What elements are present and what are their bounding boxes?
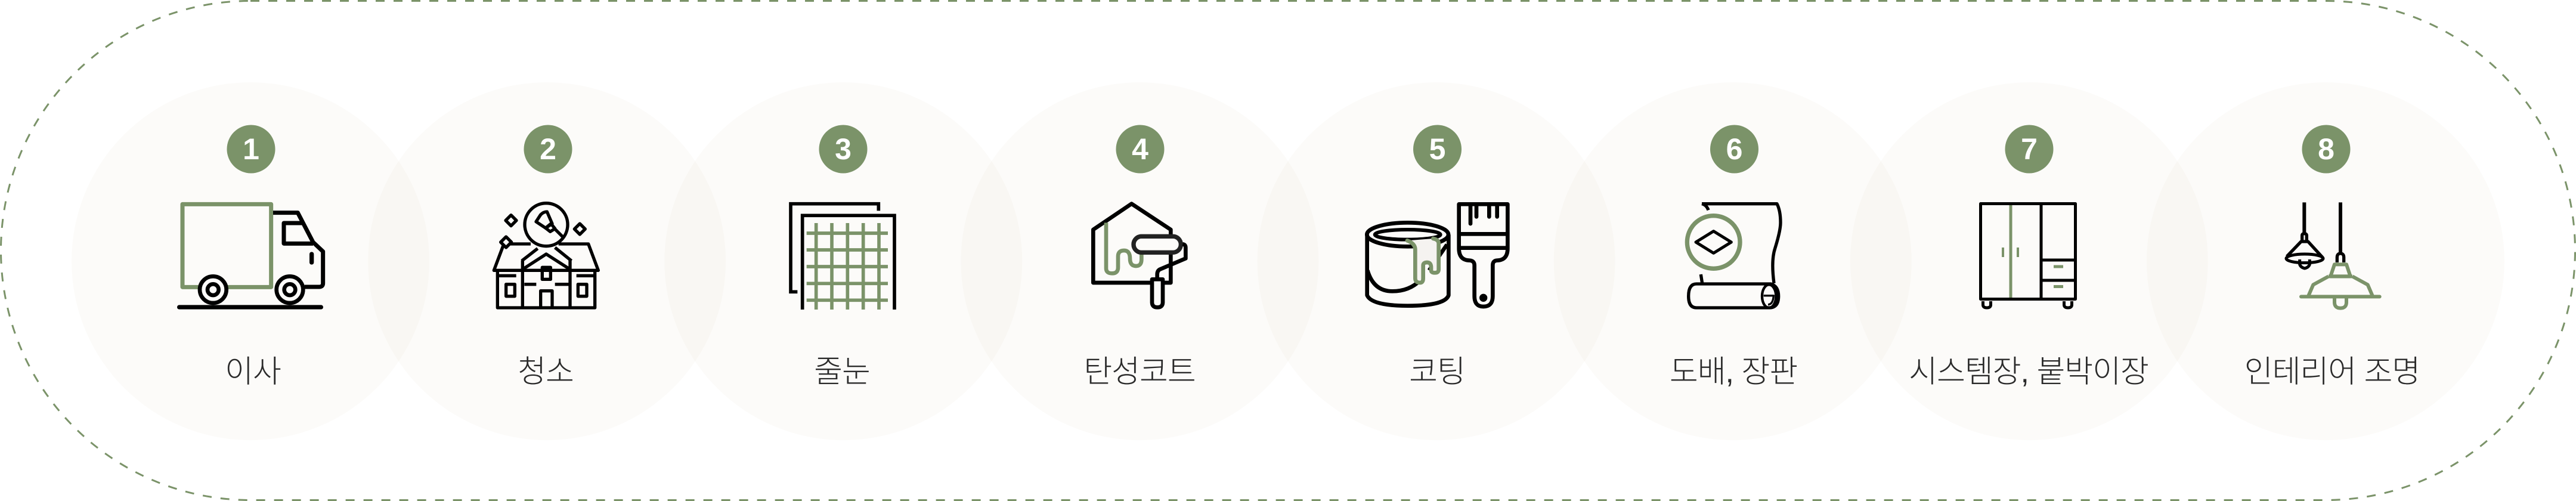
badge 1: 1	[243, 132, 259, 166]
badge 6: 6	[1726, 132, 1742, 166]
badge 3	[819, 125, 867, 173]
badge 3: 3	[835, 132, 852, 166]
label 줄눈: 줄눈	[814, 355, 870, 389]
badge 8: 8	[2318, 132, 2334, 166]
badge 7: 7	[2021, 132, 2038, 166]
icon: truck	[179, 204, 323, 307]
icon: wardrobe	[1981, 204, 2076, 308]
panel: 5 coating	[1258, 82, 1615, 440]
badge 5	[1413, 125, 1462, 173]
badge 2: 2	[540, 132, 556, 166]
badge 1	[227, 125, 275, 173]
label 코팅: 코팅	[1409, 355, 1465, 389]
panel: 4 elastic coat	[961, 82, 1318, 440]
panel: 8 lighting	[2147, 82, 2504, 440]
panel: 3 grout	[664, 82, 1022, 440]
label 인테리어 조명: 인테리어 조명	[2244, 355, 2420, 389]
icon: paint can and brush	[1367, 204, 1507, 307]
icon: tiles	[791, 204, 894, 310]
panel: 7 built-in closet	[1850, 82, 2208, 440]
icon: house and paint roller	[1093, 204, 1185, 307]
panel: 6 wallpaper and flooring	[1554, 82, 1912, 440]
badge 5: 5	[1429, 132, 1445, 166]
icon: house with broom	[494, 203, 598, 308]
badge 8	[2302, 125, 2351, 173]
badge 6	[1710, 125, 1758, 173]
icon: wallpaper roll	[1687, 204, 1781, 308]
panel: 2 cleaning	[368, 82, 726, 440]
label 이사: 이사	[225, 355, 281, 389]
badge 2	[524, 125, 572, 173]
label 도배, 장판: 도배, 장판	[1670, 355, 1797, 389]
badge 7	[2005, 125, 2054, 173]
label 탄성코트: 탄성코트	[1083, 355, 1196, 389]
panel: 1 moving	[72, 82, 429, 440]
badge 4: 4	[1132, 132, 1148, 166]
label 시스템장, 붙박이장: 시스템장, 붙박이장	[1909, 355, 2148, 389]
icon: pendant lamps	[2286, 202, 2380, 308]
badge 4	[1116, 125, 1164, 173]
label 청소: 청소	[518, 355, 574, 389]
